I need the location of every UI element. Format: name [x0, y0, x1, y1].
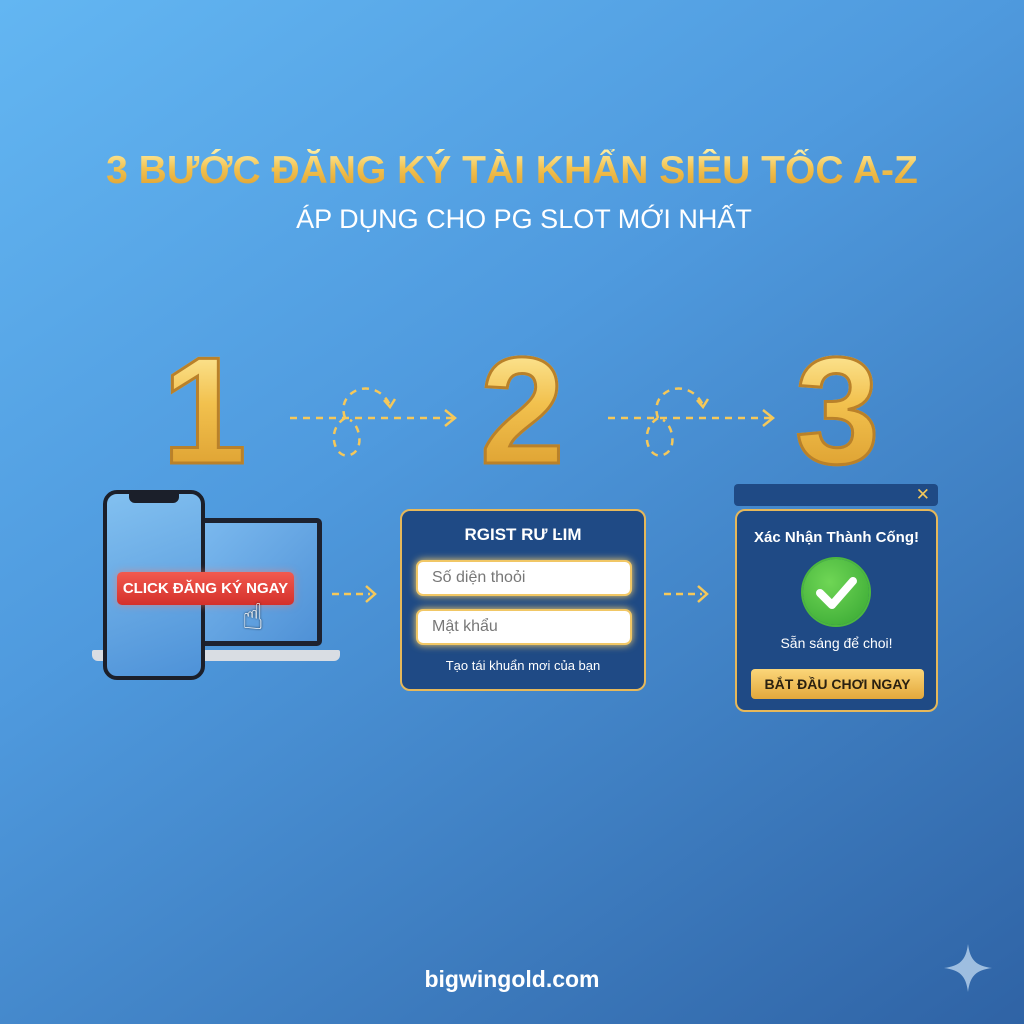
arrow: loop 1 to 2 [290, 387, 457, 457]
number 2: 2 [480, 326, 565, 496]
icon: check [803, 559, 869, 625]
input password [416, 609, 632, 645]
laptop [200, 518, 322, 646]
form note: Tạo tái khuẩn mơi của bạn [446, 658, 600, 673]
phone [103, 490, 205, 680]
arrow small 1 [332, 585, 377, 603]
red button [117, 572, 294, 605]
devices: phone and laptop [92, 490, 340, 680]
red button: CLICK ĐĂNG KÝ NGAY [123, 580, 288, 597]
form heading: RGIST RƯ ĿIM [464, 525, 582, 544]
panel: success header bar [734, 484, 938, 506]
panel: success header bar: ✕ [916, 485, 930, 504]
number 3: 3 [795, 326, 880, 496]
arrow small 2 [664, 585, 709, 603]
input phone: Số diện thoỏi [432, 569, 525, 586]
number 1: 1 [162, 326, 247, 496]
success heading: Xác Nhận Thành Cống! [754, 529, 919, 546]
ready text: Sẵn sáng để choi! [780, 635, 893, 651]
input phone [416, 560, 632, 596]
subtitle: ÁP DỤNG CHO PG SLOT MỚI NHẤT [296, 204, 752, 234]
start button [751, 669, 924, 699]
icon: sparkle [944, 944, 992, 992]
input password: Mật khẩu [432, 618, 498, 635]
footer url: bigwingold.com [424, 966, 600, 992]
arrow: loop 2 to 3 [608, 387, 775, 457]
title: 3 BƯỚC ĐĂNG KÝ TÀI KHẨN SIÊU TỐC A-Z [106, 149, 918, 192]
panel: registration form [400, 509, 646, 691]
icon: hand cursor: ☝ [242, 596, 264, 637]
start button: BẮT ĐẦU CHƠI NGAY [764, 676, 910, 692]
panel: success [735, 509, 938, 712]
